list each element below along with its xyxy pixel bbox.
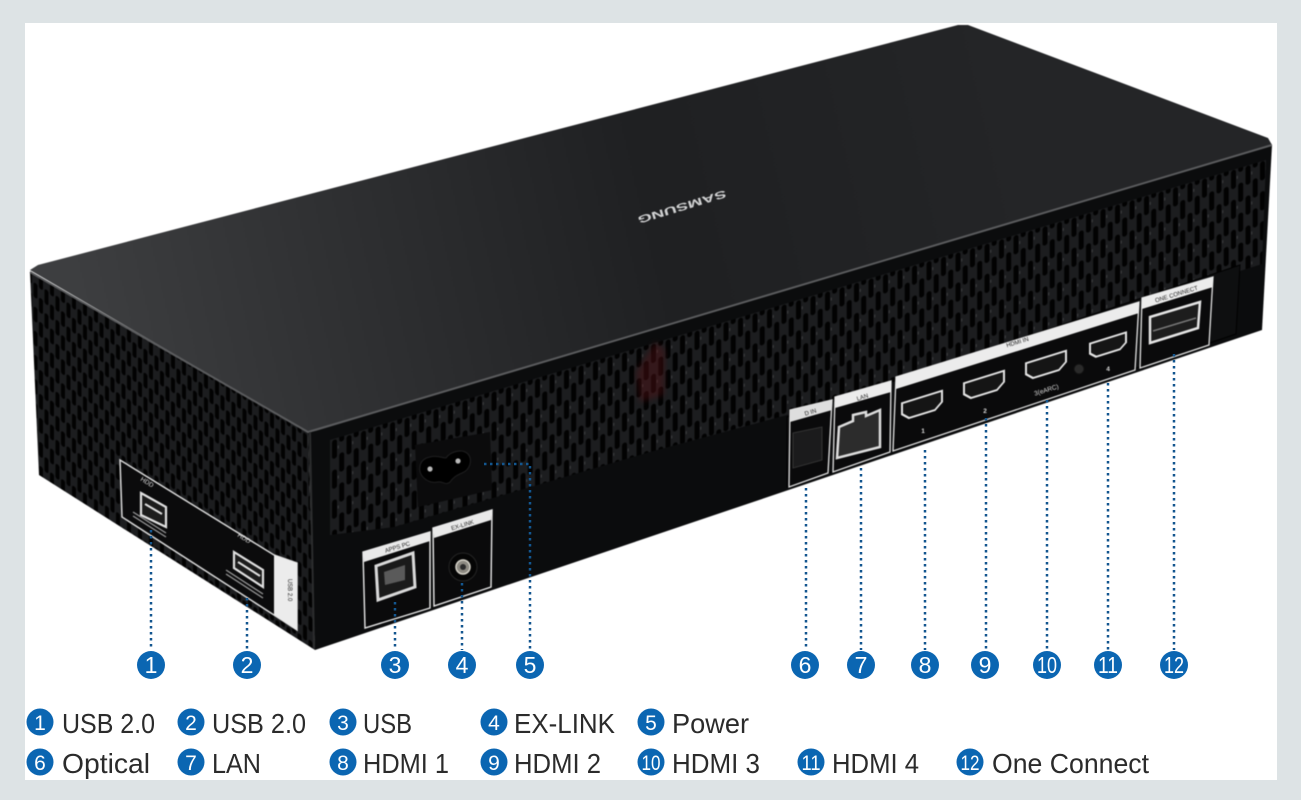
port panel: HDMI: 4	[1106, 366, 1110, 373]
chamfer highlight edges	[30, 145, 1272, 432]
legend 10	[638, 748, 760, 779]
legend 2: 2	[185, 712, 197, 735]
callout 7	[847, 651, 875, 679]
legend 1: 1	[34, 712, 46, 735]
port panel: EX-LINK: EX-LINK	[451, 520, 475, 532]
callout 3: 3	[389, 652, 401, 678]
HDMI port 3	[1026, 351, 1066, 380]
legend 6: Optical	[62, 748, 150, 779]
callout 6	[791, 651, 819, 679]
legend 12: One Connect	[992, 748, 1149, 779]
legend 9	[480, 748, 601, 779]
front vent band	[330, 160, 1266, 535]
HDMI port 4	[1090, 332, 1126, 359]
port panel: One Connect: ONE CONNECT	[1155, 286, 1199, 304]
legend 5: Power	[672, 708, 749, 739]
legend 2: USB 2.0	[212, 708, 306, 739]
port panel: HDMI: 2	[983, 408, 987, 415]
port panel: side USB	[120, 460, 297, 630]
port panel: Optical: D IN	[804, 408, 817, 418]
port panel: USB B: APPS PC	[384, 541, 412, 555]
legend 10: HDMI 3	[672, 748, 760, 779]
legend 5: 5	[645, 712, 657, 735]
USB 2 port	[234, 552, 263, 587]
port panel: Optical	[789, 400, 832, 487]
legend	[26, 708, 1149, 779]
legend 9: 9	[488, 752, 500, 775]
status sensor	[1074, 364, 1084, 374]
callout 2: 2	[241, 652, 253, 678]
device: One Connect box	[30, 25, 1272, 650]
port panel: One Connect	[1140, 277, 1213, 368]
corner edge	[310, 432, 314, 648]
USB side label	[274, 555, 297, 630]
legend 11: HDMI 4	[832, 748, 919, 779]
legend 6: 6	[34, 752, 46, 775]
legend 11: 11	[802, 752, 820, 775]
callout 2	[233, 651, 261, 679]
callout numbers	[137, 651, 1188, 679]
callout 10: 10	[1037, 652, 1057, 678]
legend 10: 10	[642, 752, 660, 775]
legend 3: USB	[363, 708, 412, 739]
red reflection	[636, 342, 665, 402]
callout 1: 1	[145, 652, 157, 678]
legend 8	[330, 748, 449, 779]
callout 8	[911, 651, 939, 679]
HDMI port 1	[902, 391, 942, 420]
legend 3: 3	[337, 712, 349, 735]
legend 7: LAN	[212, 748, 261, 779]
callout 9: 9	[979, 652, 991, 678]
legend 4: 4	[488, 712, 500, 735]
legend 9: HDMI 2	[514, 748, 601, 779]
legend 1	[26, 708, 155, 739]
callout 7: 7	[855, 652, 867, 678]
port panel: side USB: HDD	[139, 476, 155, 490]
leader lines	[151, 354, 1174, 650]
callout 5	[516, 651, 544, 679]
top face	[30, 25, 1272, 432]
legend 3	[330, 708, 412, 739]
callout 4: 4	[456, 652, 469, 678]
legend 5	[638, 708, 749, 739]
legend 7	[178, 748, 261, 779]
logo: SAMSUNG: SAMSUNG	[636, 187, 728, 226]
HDMI port 2	[964, 371, 1004, 400]
legend 12: 12	[960, 752, 980, 775]
callout 4	[448, 651, 476, 679]
left side face with vents	[30, 272, 315, 650]
legend 4: EX-LINK	[514, 708, 615, 739]
port panel: LAN	[833, 381, 891, 472]
USB 1 port	[141, 493, 166, 527]
callout 5: 5	[524, 652, 536, 678]
callout 3	[381, 651, 409, 679]
port panel: side USB: USB 2.0	[286, 579, 292, 602]
callout 9	[971, 651, 999, 679]
legend 11	[798, 748, 919, 779]
port: power inlet	[415, 432, 492, 507]
port panel: HDMI	[893, 302, 1139, 451]
port panel: HDMI: 1	[921, 428, 925, 435]
callout 11: 11	[1098, 652, 1118, 678]
callout 8: 8	[919, 652, 931, 678]
port panel: USB B	[363, 532, 430, 628]
callout 12: 12	[1164, 652, 1184, 678]
port panel: LAN: LAN	[856, 393, 869, 403]
legend 8: 8	[337, 752, 349, 775]
port panel: HDMI: HDMI IN	[1006, 337, 1030, 349]
callout 1	[137, 651, 165, 679]
lower right recessed panel	[787, 265, 1240, 487]
port panel: HDMI: 3(eARC)	[1033, 384, 1060, 398]
front face	[308, 145, 1272, 650]
legend 1: USB 2.0	[62, 708, 155, 739]
legend 7: 7	[185, 752, 197, 775]
port panel: side USB: HDD	[236, 532, 252, 546]
callout 6: 6	[799, 652, 811, 678]
legend 8: HDMI 1	[363, 748, 449, 779]
legend 2	[178, 708, 306, 739]
port panel: EX-LINK	[433, 510, 492, 606]
